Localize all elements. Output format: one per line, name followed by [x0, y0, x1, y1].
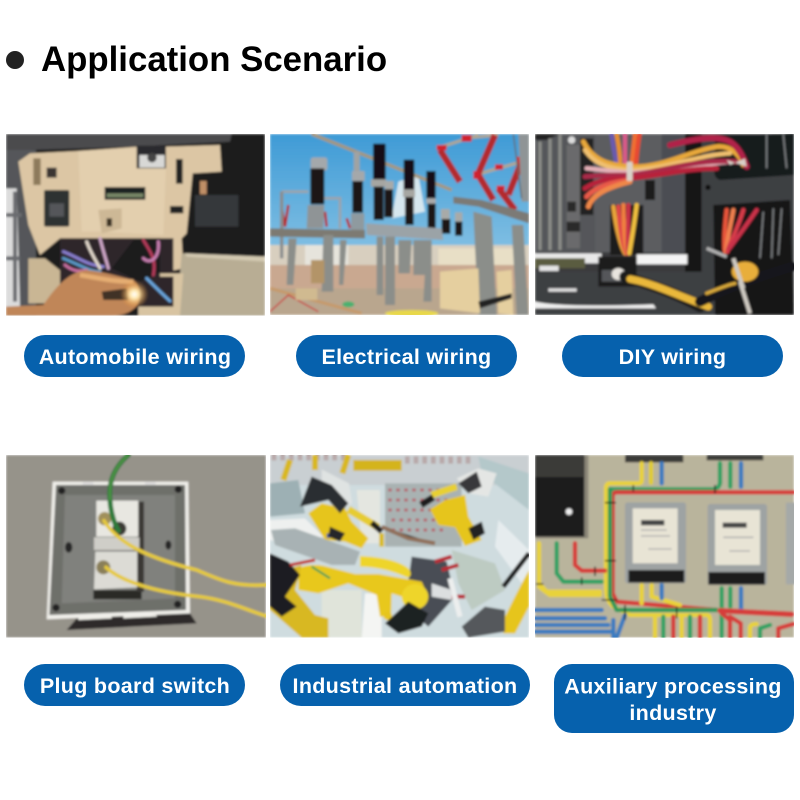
title — [6, 40, 387, 79]
label: Auxiliary processing industry — [554, 664, 794, 733]
heading text: Application Scenario — [41, 40, 387, 79]
upper left robot — [308, 503, 368, 548]
label: Plug board switch — [24, 664, 245, 706]
bullet — [6, 51, 24, 69]
photo: meter panel wiring — [535, 455, 796, 638]
photo: car dashboard wiring — [6, 134, 265, 316]
label: Automobile wiring: Automobile wiring — [39, 345, 231, 369]
photo: substation equipment — [270, 134, 529, 317]
panel: automobile wiring — [6, 134, 265, 377]
upper right robot — [432, 487, 457, 495]
lower right robot — [503, 570, 529, 633]
panel: DIY wiring — [535, 133, 794, 377]
label: Automobile wiring — [24, 335, 245, 377]
photo: robot arms factory — [270, 455, 529, 638]
label: DIY wiring: DIY wiring — [619, 345, 726, 369]
lower left robot — [270, 518, 323, 543]
panel: auxiliary processing industry — [535, 455, 796, 733]
label: Industrial automation: Industrial automation — [293, 674, 517, 698]
label: Auxiliary processing industry: industry — [629, 701, 717, 725]
label: Auxiliary processing industry: Auxiliary processing — [564, 674, 782, 698]
label: Plug board switch: Plug board switch — [40, 674, 230, 698]
label: Electrical wiring: Electrical wiring — [322, 345, 492, 369]
label: Industrial automation — [280, 664, 530, 706]
photo: PC case cables — [535, 133, 794, 315]
label: DIY wiring — [562, 335, 783, 377]
label: Electrical wiring — [296, 335, 517, 377]
panel: plug board switch — [6, 455, 266, 706]
panel: electrical wiring — [270, 134, 529, 377]
centre machinery — [405, 557, 455, 627]
panel: industrial automation — [270, 455, 530, 706]
photo: wall switch back — [6, 455, 266, 638]
